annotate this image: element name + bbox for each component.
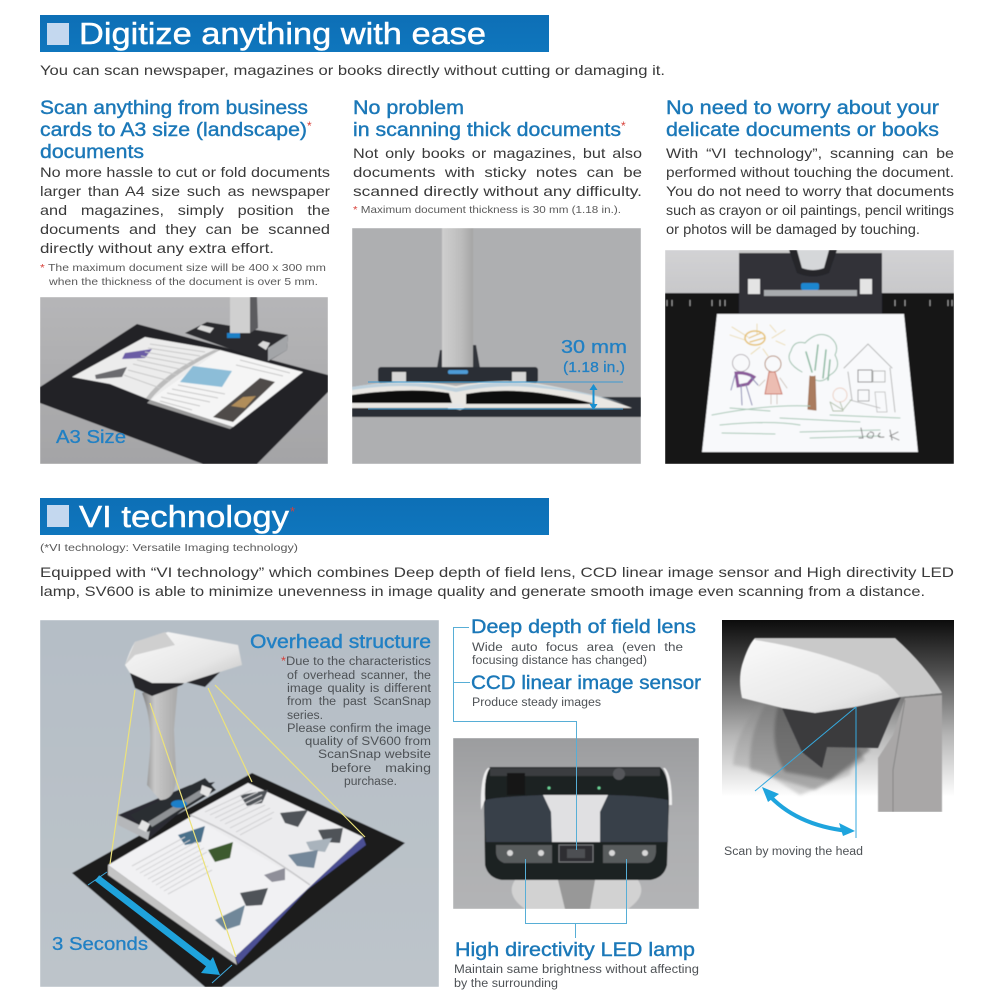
column 2 text: thick documents: Not only books or magazines, but also [353, 145, 642, 161]
column 3 text: delicate documents [666, 98, 954, 237]
column 1 text: A3 size: No more hassle to cut or fold documents [40, 164, 330, 180]
column 1 text: A3 size: * [307, 119, 312, 133]
overhead structure note: purchase. [344, 776, 397, 788]
column 2 text: thick documents: scanned directly without any difficulty. [353, 183, 642, 199]
column 1 text: A3 size: directly without any extra effort. [40, 240, 274, 256]
callout: Deep depth of field lens [471, 617, 696, 667]
VI technology description [40, 564, 954, 599]
overhead structure note: series. [287, 710, 323, 722]
blue 3 seconds arrow [88, 872, 232, 983]
30 mm label: (1.18 in.) [563, 359, 625, 376]
overhead structure note: ScanSnap website [318, 749, 431, 761]
column 1 text: A3 size [40, 98, 330, 288]
column 3 text: delicate documents: such as crayon or oil paintings, pencil writings [666, 202, 954, 218]
column 3 text: delicate documents: With “VI technology”, scanning can be [666, 145, 954, 161]
photo: A3 size magazine on mat [40, 297, 328, 464]
photo: 30 mm thick book side view [352, 228, 641, 464]
head angle lines and arc arrow [755, 707, 856, 838]
scan projection lines [110, 685, 365, 957]
column 3 text: delicate documents: or photos will be damaged by touching. [666, 221, 920, 237]
3 Seconds label: 3 Seconds [52, 934, 148, 954]
column 1 text: A3 size: and magazines, simply position the [40, 202, 330, 218]
intro sentence: You can scan newspaper, magazines or books directly without cutting or damaging it. [40, 62, 665, 78]
overhead structure note: from the past ScanSnap [287, 696, 431, 708]
column 3 text: delicate documents: No need to worry about your [666, 98, 940, 119]
Overhead structure heading: Overhead structure [250, 632, 431, 653]
panel: overhead structure photo [40, 620, 439, 987]
title bar: Digitize anything with ease: Digitize anything with ease [79, 16, 486, 51]
callout: High directivity LED lamp: by the surrounding [454, 978, 558, 990]
column 3 text: delicate documents: You do not need to worry that documents [666, 183, 954, 199]
callout: CCD linear image sensor [471, 673, 702, 709]
A3 Size label: A3 Size [56, 427, 126, 447]
overhead structure note: *Due to the characteristics [281, 656, 431, 668]
column 2 text: thick documents: * [621, 119, 626, 133]
title bar: Digitize anything with ease [40, 15, 549, 52]
column 3 text: delicate documents: delicate documents or books [666, 120, 939, 141]
title bar: VI technology: * [290, 504, 295, 519]
column 2 text: thick documents [353, 98, 642, 216]
title bar: VI technology: VI technology [79, 499, 290, 534]
overhead structure note: before making [331, 763, 431, 775]
overhead structure note: Please confirm the image [287, 723, 431, 735]
callout: Deep depth of field lens: Deep depth of field lens [471, 617, 696, 638]
column 2 text: thick documents: No problem [353, 98, 464, 119]
column 2 text: thick documents: * Maximum document thickness is 30 mm (1.18 in.). [353, 204, 621, 216]
VI technology footnote: (*VI technology: Versatile Imaging technology) [40, 542, 298, 554]
VI technology description: Equipped with “VI technology” which combines Deep depth of field lens, CCD linear image sensor and High directivity LED [40, 564, 954, 580]
callout connector lines [454, 628, 626, 938]
column 1 text: A3 size: documents and they can be scanned [40, 221, 330, 237]
photo: scanner head moving [722, 620, 954, 838]
overhead structure note: image quality is different [287, 683, 432, 695]
column 2 text: thick documents: documents with sticky notes can be [353, 164, 642, 180]
title bar: VI technology [40, 498, 549, 535]
callout: High directivity LED lamp [454, 940, 699, 990]
column 1 text: A3 size: cards to A3 size (landscape) [40, 120, 307, 141]
column 1 text: A3 size: when the thickness of the document is over 5 mm. [48, 276, 318, 288]
caption: scan by moving the head: Scan by moving the head [724, 846, 863, 858]
callout: CCD linear image sensor: Produce steady images [472, 697, 601, 709]
column 3 text: delicate documents: performed without touching the document. [666, 164, 954, 180]
30 mm label [561, 337, 627, 376]
callout: Deep depth of field lens: Wide auto focus area (even the [472, 642, 683, 654]
overhead structure note [281, 656, 432, 788]
callout: High directivity LED lamp: Maintain same brightness without affecting [454, 964, 699, 976]
overhead structure note: of overhead scanner, the [287, 670, 431, 682]
photo: child's drawing on mat [665, 250, 954, 464]
callout: High directivity LED lamp: High directivity LED lamp [455, 940, 695, 961]
column 1 text: A3 size: documents [40, 142, 144, 163]
callout: Deep depth of field lens: focusing distance has changed) [472, 655, 647, 667]
column 2 text: thick documents: in scanning thick documents [353, 120, 621, 141]
column 1 text: A3 size: larger than A4 size such as newspaper [40, 183, 330, 199]
column 1 text: A3 size: * The maximum document size will be 400 x 300 mm [40, 262, 326, 274]
30 mm label: 30 mm [561, 337, 627, 357]
column 1 text: A3 size: Scan anything from business [40, 98, 308, 119]
callout: CCD linear image sensor: CCD linear image sensor [471, 673, 702, 694]
photo: scanner head underside [453, 738, 699, 909]
overhead structure note: quality of SV600 from [305, 736, 431, 748]
30 mm dimension lines and arrow [368, 382, 623, 410]
VI technology description: lamp, SV600 is able to minimize unevenness in image quality and generate smooth image even scanning from a distance. [40, 583, 925, 599]
